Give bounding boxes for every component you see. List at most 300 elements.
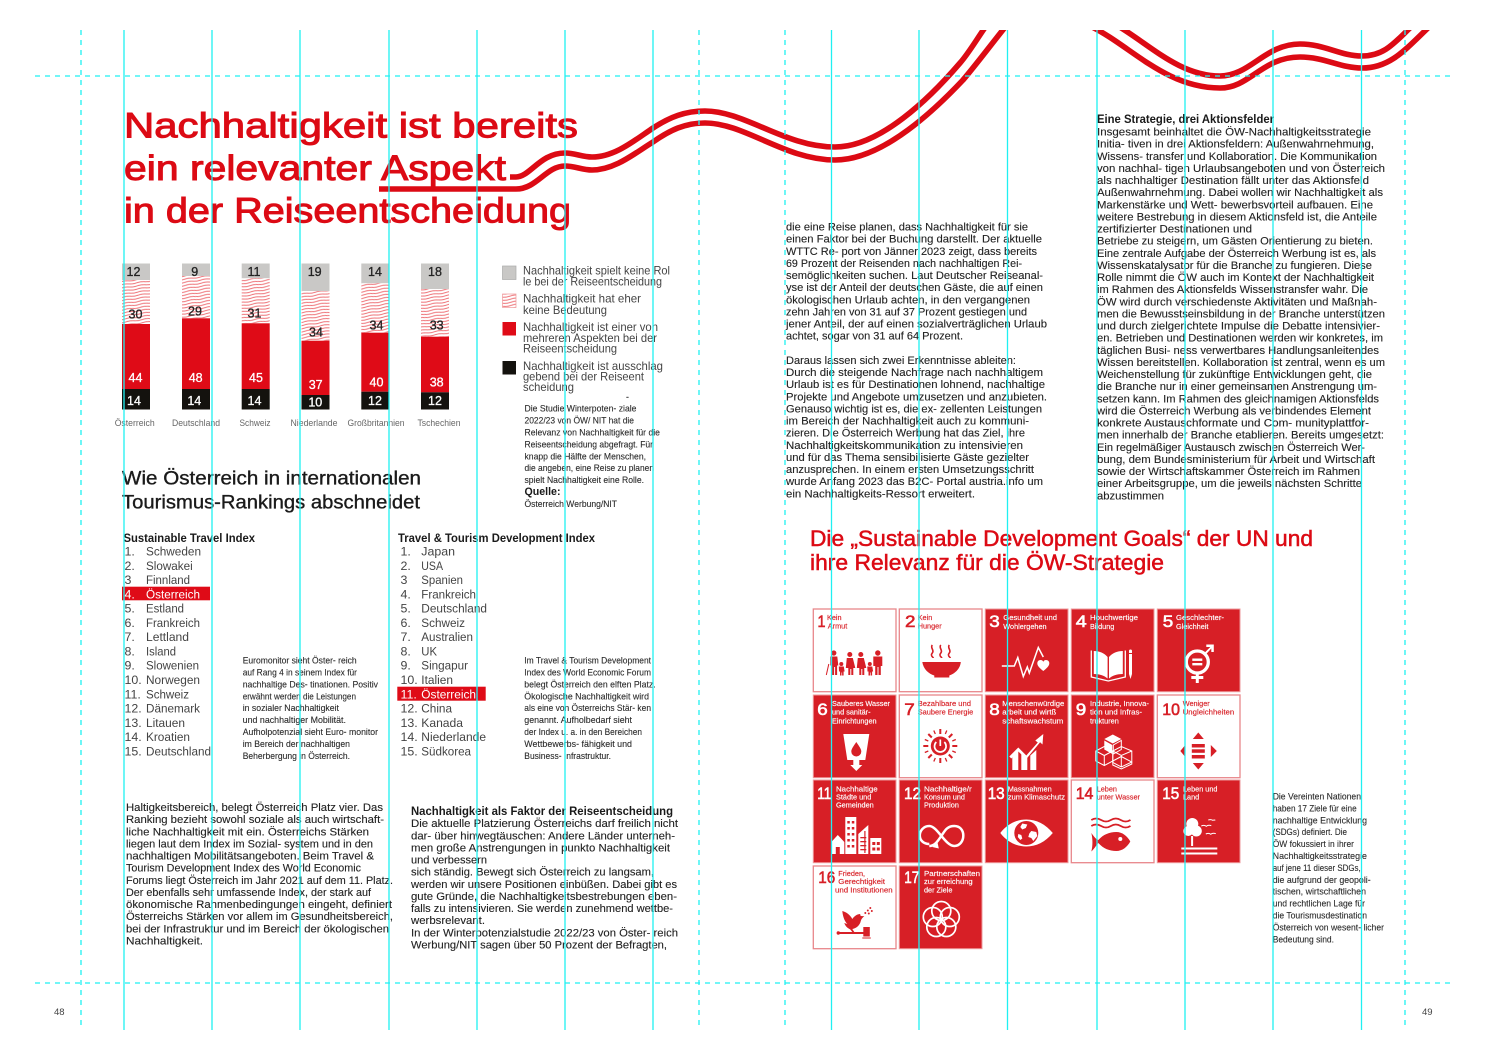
body text: rankings: Ranking bezieht sowohl soziale als auch wirtschaft- xyxy=(126,814,384,826)
body text: Eine Strategie, drei Aktionsfelder: Rolle nimmt die ÖW auch im Kontext der Nachhaltigkeit xyxy=(1097,272,1375,284)
bar: Schweiz xyxy=(240,264,271,428)
note: World Economic Forum: Business- Infrastruktur. xyxy=(524,751,611,761)
note: Vereinte Nationen: Die Vereinten Nationen xyxy=(1273,792,1361,802)
bar: Österreich: Österreich xyxy=(115,417,155,428)
SDG tile 13: zum Klimaschutz xyxy=(1008,792,1065,802)
list: Travel & Tourism Development Index: Schweiz xyxy=(421,616,465,630)
bar: Großbritannien: 34 xyxy=(370,318,383,332)
list: Sustainable Travel Index: 2. xyxy=(124,559,135,573)
bar: Niederlande: 10 xyxy=(308,396,322,410)
body text: middle column: Genauso wichtig ist es, die ex- zellenten Leistungen xyxy=(786,404,1042,416)
SDG tile 5 xyxy=(1157,609,1240,692)
note: Vereinte Nationen: nachhaltige Entwicklung xyxy=(1273,815,1367,825)
body text: Faktor der Reiseentscheidung: Die aktuelle Platzierung Österreichs darf freilich nicht xyxy=(411,818,679,830)
note: Euromonitor: Aufholpotenzial sieht Euro- monitor xyxy=(243,727,378,737)
list: Travel & Tourism Development Index: Deutschland xyxy=(421,602,487,616)
bar: Großbritannien: 40 xyxy=(370,376,383,390)
SDG tile 17: zur erreichung xyxy=(924,877,973,886)
body text: Faktor der Reiseentscheidung: dar- über hinwegtäuschen: Andere Länder unterneh- xyxy=(411,830,675,842)
SDG tile 4: Bildung xyxy=(1090,622,1114,631)
bar: Tschechien: 38 xyxy=(430,376,444,390)
bar: Schweiz: 11 xyxy=(248,265,261,279)
SDG tile 7: Saubere Energie xyxy=(918,708,973,717)
list: Travel & Tourism Development Index: Travel & Tourism Development Index xyxy=(398,532,596,545)
body text: rankings: Österreichs Stärken vor allem im Gesundheitsbereich, xyxy=(126,911,393,923)
list: Sustainable Travel Index: 8. xyxy=(124,644,135,658)
SDG tile 11 xyxy=(813,780,896,863)
SDG tile 1: Kein xyxy=(827,613,842,622)
list: Travel & Tourism Development Index: 4. xyxy=(400,587,411,601)
list: Sustainable Travel Index: Island xyxy=(146,644,176,658)
body text: Eine Strategie, drei Aktionsfelder: setzen kann. Im Rahmen des gleichnamigen Aktionsfelds xyxy=(1097,393,1379,405)
body text: middle column: WTTC Re- port von Jänner 2023 zeigt, dass bereits xyxy=(786,246,1037,258)
list: Sustainable Travel Index: Sustainable Travel Index xyxy=(124,532,256,545)
SDG tile 9: tion und Infras- xyxy=(1090,708,1143,717)
body text: Eine Strategie, drei Aktionsfelder: Wissens- transfer und Kollaboration. Die Kommunikation xyxy=(1097,151,1377,163)
body text: rankings: Tourism Development Index des World Economic xyxy=(126,863,361,875)
SDG tile 6: und sanitär- xyxy=(832,708,871,717)
list: Travel & Tourism Development Index: USA xyxy=(421,559,444,573)
legend: Nachhaltigkeit ist einer von xyxy=(523,321,658,334)
note: Euromonitor xyxy=(243,656,379,761)
legend: scheidung xyxy=(523,381,574,394)
note: Euromonitor: und nachhaltiger Mobilität. xyxy=(243,715,346,725)
SDG tile 2: 2 xyxy=(905,612,915,631)
legend xyxy=(502,264,670,402)
body text: middle column: Nachhaltigkeitskommunikation zu intensivieren xyxy=(786,440,1023,452)
body text: middle column: zieren. Die Österreich Werbung hat das Ziel, ihre xyxy=(786,428,1025,440)
list: Sustainable Travel Index: 14. xyxy=(124,730,142,744)
body text: Eine Strategie, drei Aktionsfelder: Wissen bereitstellen. Kollaboration ist zentral, wenn es um xyxy=(1097,357,1385,369)
SDG tile 14: unter Wasser xyxy=(1097,792,1141,802)
note: Vereinte Nationen: auf jene 11 dieser SDGs, xyxy=(1273,863,1361,873)
body text: middle column: im Bereich der Nachhaltigkeit auch zu kommuni- xyxy=(786,416,1029,428)
body text: middle column: und für das Thema sensibilisierte Gäste gezielter xyxy=(786,452,1029,464)
note: Euromonitor: im Bereich der nachhaltigen xyxy=(243,739,350,749)
SDG tile 2 xyxy=(899,609,982,692)
list: Sustainable Travel Index: Schweiz xyxy=(146,687,189,701)
SDG tile 1: 1 xyxy=(817,612,825,631)
body text: Faktor der Reiseentscheidung: falls zu intensivieren. Sie werden zunehmend wettbe- xyxy=(411,903,673,915)
page number left: 48 xyxy=(54,1007,65,1018)
bar: Deutschland: 14 xyxy=(187,394,201,408)
body text: Eine Strategie, drei Aktionsfelder: wird die Österreich Werbung als verbindendes Element xyxy=(1096,406,1372,418)
SDG tile 16: Frieden, xyxy=(838,869,865,878)
bar: Niederlande: 34 xyxy=(309,326,323,340)
list: Sustainable Travel Index: 6. xyxy=(124,616,135,630)
list: Sustainable Travel Index: Schweden xyxy=(146,545,201,559)
SDG tile 3: Wohlergehen xyxy=(1003,622,1047,631)
heading: rankings xyxy=(122,468,421,514)
bar: Schweiz: Schweiz xyxy=(240,417,271,428)
bar: Niederlande: 37 xyxy=(309,378,323,392)
list: Sustainable Travel Index: Finnland xyxy=(146,573,190,587)
note: Vereinte Nationen: haben 17 Ziele für eine xyxy=(1273,803,1357,813)
note: Vereinte Nationen: die Tourismusdestination xyxy=(1273,910,1367,920)
SDG tile 9: Industrie, Innova- xyxy=(1090,699,1150,708)
list: Travel & Tourism Development Index: 9. xyxy=(400,659,411,673)
body text: rankings: Haltigkeitsbereich, belegt Österreich Platz vier. Das xyxy=(126,802,383,814)
SDG tile 13: 13 xyxy=(988,784,1005,803)
SDG tile 11: Städte und xyxy=(836,792,871,802)
list: Travel & Tourism Development Index: Niederlande xyxy=(421,730,486,744)
list: Travel & Tourism Development Index: Italien xyxy=(421,673,453,687)
list: Sustainable Travel Index: Estland xyxy=(146,602,184,616)
title: in der Reiseentscheidung xyxy=(124,192,571,230)
body text: rankings: liegen laut dem Index im Sozial- system und in den xyxy=(126,838,373,850)
note: Vereinte Nationen: tischen, wirtschaftlichen xyxy=(1273,887,1366,897)
body text: Faktor der Reiseentscheidung: Nachhaltigkeit als Faktor der Reiseentscheidung xyxy=(411,805,673,818)
SDG tile 9 xyxy=(1071,695,1154,778)
SDG tile 11: Nachhaltige xyxy=(836,784,878,794)
body text: Eine Strategie, drei Aktionsfelder: Eine zentrale Aufgabe der Österreich Werbung ist es, als xyxy=(1097,248,1376,260)
chart note and source: spielt Nachhaltigkeit eine Rolle. xyxy=(524,475,644,485)
body text: Eine Strategie, drei Aktionsfelder: ÖW wird durch verschiedenste Aktivitäten und Maßnah- xyxy=(1097,296,1377,308)
list: Travel & Tourism Development Index: 6. xyxy=(400,616,411,630)
list: Sustainable Travel Index: 13. xyxy=(124,716,142,730)
body text: Eine Strategie, drei Aktionsfelder: einer Arbeitsgruppe, um die jeweils nächsten Schritte xyxy=(1097,478,1362,490)
heading: Sustainable Development Goals xyxy=(810,526,1313,575)
list: Travel & Tourism Development Index: 7. xyxy=(400,630,411,644)
legend: Nachhaltigkeit hat eher xyxy=(523,292,641,306)
SDG tile 7: Bezahlbare und xyxy=(918,699,971,708)
note: World Economic Forum: genannt. Aufholbedarf sieht xyxy=(524,715,633,725)
body text: Eine Strategie, drei Aktionsfelder: Eine Strategie, drei Aktionsfelder xyxy=(1097,113,1274,126)
SDG tile 15: Land xyxy=(1183,792,1199,802)
bar: Tschechien xyxy=(418,264,460,428)
note: Vereinte Nationen: und rechtlichen Lage für xyxy=(1273,899,1365,909)
body text: Eine Strategie, drei Aktionsfelder: abzustimmen xyxy=(1097,490,1164,502)
SDG tile 12: Produktion xyxy=(924,800,959,810)
SDG tile 8: arbeit und wirtß xyxy=(1002,708,1057,717)
SDG tile 3: Gesundheit und xyxy=(1003,613,1057,622)
list: Sustainable Travel Index xyxy=(122,532,256,758)
body text: Eine Strategie, drei Aktionsfelder: konkrete Austauschformate und Com- munityplattfor- xyxy=(1097,418,1369,430)
body text: middle column: wurde Anfang 2023 das B2C- Portal austria.info um xyxy=(785,476,1043,488)
body text: middle column: 69 Prozent der Reisenden nach nachhaltigen Rei- xyxy=(786,258,1022,270)
list: Travel & Tourism Development Index: 1. xyxy=(400,545,411,559)
body text: Faktor der Reiseentscheidung: In der Winterpotenzialstudie 2022/23 von Öster- reich xyxy=(411,927,678,939)
list: Sustainable Travel Index: 10. xyxy=(124,673,142,687)
list: Sustainable Travel Index: Deutschland xyxy=(146,744,211,758)
list: Sustainable Travel Index: Slowakei xyxy=(146,559,193,573)
list: Travel & Tourism Development Index: Spanien xyxy=(421,573,463,587)
body text: rankings: bei der Infrastruktur und im Bereich der ökologischen xyxy=(126,923,389,935)
page number right: 49 xyxy=(1422,1007,1433,1018)
bar: Niederlande: 19 xyxy=(308,265,322,279)
note: Euromonitor: auf Rang 4 in seinem Index für xyxy=(243,667,357,677)
list: Travel & Tourism Development Index: Österreich xyxy=(421,687,476,701)
SDG tile 15 xyxy=(1157,780,1240,863)
note: Vereinte Nationen: Nachhaltigkeitsstrategie xyxy=(1273,851,1367,861)
SDG tile 5: 5 xyxy=(1163,612,1173,631)
list: Travel & Tourism Development Index: 2. xyxy=(400,559,411,573)
list: Sustainable Travel Index: 5. xyxy=(124,602,135,616)
body text: Eine Strategie, drei Aktionsfelder: Initia- tiven in drei Aktionsfeldern: Außenwahrnehmung, xyxy=(1097,139,1374,151)
SDG tile 10: Weniger xyxy=(1183,699,1210,708)
body text: Eine Strategie, drei Aktionsfelder: täglichen Busi- ness verwertbares Handlungsanleitendes xyxy=(1097,345,1379,357)
bar: Niederlande: Niederlande xyxy=(290,417,338,428)
body text: middle column: anzusprechen. In einem ersten Umsetzungsschritt xyxy=(786,464,1035,476)
legend: keine Bedeutung xyxy=(523,304,607,317)
body text: middle column: Urlaub ist es für Destinationen lohnend, nachhaltige xyxy=(786,379,1045,391)
SDG tile 15: Leben und xyxy=(1183,784,1218,794)
chart note and source: Reiseentscheidung abgefragt. Für xyxy=(524,440,653,450)
body text: Eine Strategie, drei Aktionsfelder: Betriebe zu steigern, um Gästen Orientierung zu bieten. xyxy=(1097,236,1373,248)
SDG tile 14 xyxy=(1071,780,1154,863)
SDG tile 1: Armut xyxy=(828,622,847,630)
list: Travel & Tourism Development Index: 11. xyxy=(400,687,417,701)
title xyxy=(124,106,578,230)
chart note and source: Die Studie Winterpoten- ziale xyxy=(524,404,637,414)
bar: Niederlande xyxy=(290,264,338,428)
SDG tile 10: 10 xyxy=(1162,700,1180,719)
bar: Österreich: 30 xyxy=(129,308,142,322)
SDG tile 10: Ungleichheiten xyxy=(1183,708,1234,717)
list: Travel & Tourism Development Index: China xyxy=(421,702,452,716)
SDG tile 16: und Institutionen xyxy=(835,886,893,894)
list: Travel & Tourism Development Index: Frankreich xyxy=(421,587,476,601)
note: World Economic Forum: Im Travel & Tourism Development xyxy=(524,656,652,666)
list: Travel & Tourism Development Index: Japan xyxy=(421,545,455,559)
SDG tile grid xyxy=(813,609,1240,949)
SDG tile 9: trukturen xyxy=(1090,716,1119,725)
SDG tile 6: Einrichtungen xyxy=(832,716,877,725)
bar: Schweiz: 45 xyxy=(249,371,263,385)
body text: Faktor der Reiseentscheidung: sich ständig. Bewegt sich Österreich zu langsam, xyxy=(411,867,654,879)
body text: Faktor der Reiseentscheidung: werden wir unsere Positionen einbüßen. Dabei gibt es xyxy=(410,879,677,891)
body text: Eine Strategie, drei Aktionsfelder: im Rahmen des Aktionsfelds Wissenstransfer wahr. Die xyxy=(1097,284,1368,296)
SDG tile 16 xyxy=(813,866,896,949)
bar: Österreich: 44 xyxy=(129,371,142,385)
SDG tile 2: Kein xyxy=(918,613,932,622)
body text: Eine Strategie, drei Aktionsfelder: die Branche nur in einer gemeinsamen Anstrengung um- xyxy=(1097,381,1377,393)
note: World Economic Forum: belegt Österreich den elften Platz. xyxy=(524,679,656,689)
note: Euromonitor: nachhaltige Des- tinationen. Positiv xyxy=(243,679,379,689)
SDG tile 15: 15 xyxy=(1162,784,1179,803)
body text: Eine Strategie, drei Aktionsfelder: Weichenstellung für zukünftige Entwicklungen geht, die xyxy=(1097,369,1372,381)
bar: Deutschland: Deutschland xyxy=(172,417,220,428)
body text: middle column: yse ist der Anteil der deutschen Gäste, die auf einen xyxy=(786,282,1043,294)
heading: Sustainable Development Goals: ihre Relevanz für die ÖW-Strategie xyxy=(810,550,1164,575)
SDG tile 17: der Ziele xyxy=(924,886,952,894)
list: Sustainable Travel Index: 3 xyxy=(124,573,132,587)
list: Sustainable Travel Index: 4. xyxy=(124,587,135,601)
list: Sustainable Travel Index: 1. xyxy=(124,545,135,559)
SDG tile 4: 4 xyxy=(1076,612,1087,631)
note: World Economic Forum: als eine von Österreichs Stär- ken xyxy=(524,703,651,713)
list: Travel & Tourism Development Index: 15. xyxy=(400,744,418,758)
bar: Deutschland: 29 xyxy=(188,304,202,318)
SDG tile 13 xyxy=(985,780,1068,863)
body text: Eine Strategie, drei Aktionsfelder: men die Bewusstseinsbildung in der Branche unterstützen xyxy=(1097,308,1385,320)
note: World Economic Forum: Wettbewerbs- fähigkeit und xyxy=(524,739,632,749)
body text: rankings xyxy=(126,802,393,947)
bar: Großbritannien xyxy=(348,264,404,428)
SDG tile 12 xyxy=(899,780,982,863)
bar: Großbritannien: 12 xyxy=(368,394,382,408)
list: Travel & Tourism Development Index: 8. xyxy=(400,644,411,658)
legend: Nachhaltigkeit ist ausschlag xyxy=(523,360,663,373)
body text: Faktor der Reiseentscheidung: werbsrelevant. xyxy=(410,915,485,927)
list: Sustainable Travel Index: 11. xyxy=(124,687,141,701)
chart note and source: Relevanz von Nachhaltigkeit für die xyxy=(524,428,660,438)
wave ribbon right page xyxy=(1090,26,1430,88)
note: Euromonitor: erwähnt werden die Leistungen xyxy=(243,691,356,701)
body text: Eine Strategie, drei Aktionsfelder: und durch zielgerichtete Impulse die Debatte intensivier- xyxy=(1097,321,1380,333)
list: Sustainable Travel Index: Dänemark xyxy=(146,702,201,716)
SDG tile 12: Konsum und xyxy=(924,792,965,802)
SDG tile 8 xyxy=(985,695,1068,778)
heading: Sustainable Development Goals: Die „Sustainable Development Goals“ der UN und xyxy=(810,526,1313,551)
SDG tile 16: 16 xyxy=(818,868,835,887)
SDG tile 7: 7 xyxy=(904,700,915,719)
title: ein relevanter Aspekt xyxy=(124,149,506,188)
list: Sustainable Travel Index: Litauen xyxy=(146,716,185,730)
legend: Reiseentscheidung xyxy=(523,342,617,356)
body text: Eine Strategie, drei Aktionsfelder: Markenstärke und Wett- bewerbsvorteil aufbauen. Eine xyxy=(1097,199,1373,211)
SDG tile 14: 14 xyxy=(1076,784,1093,803)
body text: middle column: Durch die steigende Nachfrage nach nachhaltigem xyxy=(786,367,1043,379)
bar: Tschechien: Tschechien xyxy=(418,417,460,428)
list: Sustainable Travel Index: 15. xyxy=(124,744,142,758)
body text: Eine Strategie, drei Aktionsfelder: Wissenskatalysator für die Branche zu fungieren. Diese xyxy=(1097,260,1372,272)
SDG tile 4: Houchwertige xyxy=(1090,613,1138,622)
body text: middle column: ein Nachhaltigkeits-Ressort erweitert. xyxy=(786,488,975,500)
bar: Österreich xyxy=(115,264,155,428)
body text: rankings: Forums liegt Österreich im Jahr 2021 auf dem 11. Platz. xyxy=(126,875,393,887)
SDG tile 6: Sauberes Wasser xyxy=(832,699,891,708)
body text: rankings: nachhaltigen Mobilitätsangeboten. Beim Travel & xyxy=(126,850,374,862)
note: Euromonitor: Euromonitor sieht Öster- reich xyxy=(243,656,357,666)
bar: Österreich: 12 xyxy=(127,265,140,279)
note: World Economic Forum xyxy=(524,656,656,761)
body text: rankings: Der ebenfalls sehr umfassende Index, der stark auf xyxy=(126,887,372,899)
body text: Eine Strategie, drei Aktionsfelder: weitere Bestrebung in diesem Aktionsfeld ist, die Anteile xyxy=(1096,211,1377,223)
body text: middle column: ökologischen Urlaub achten, in den vergangenen xyxy=(786,294,1030,306)
SDG tile 4 xyxy=(1071,609,1154,692)
body text: middle column xyxy=(785,222,1047,500)
body text: Eine Strategie, drei Aktionsfelder: men innerhalb der Branche etablieren. Bereits umgesetzt: xyxy=(1097,430,1384,442)
bar: Österreich: 14 xyxy=(127,394,141,408)
body text: middle column: die eine Reise planen, dass Nachhaltigkeit für sie xyxy=(786,222,1028,234)
body text: Faktor der Reiseentscheidung: gute Gründe, die Nachhaltigkeitsbestrebungen eben- xyxy=(411,891,677,903)
legend: gebend bei der Reiseent xyxy=(523,370,645,384)
title: Nachhaltigkeit ist bereits xyxy=(124,106,578,146)
list: Sustainable Travel Index: 9. xyxy=(124,659,135,673)
SDG tile 1 xyxy=(813,609,896,692)
body text: Faktor der Reiseentscheidung: Werbung/NIT sagen über 50 Prozent der Befragten, xyxy=(411,939,667,951)
body text: rankings: Nachhaltigkeit. xyxy=(126,935,203,947)
SDG tile 7 xyxy=(899,695,982,778)
SDG tile 17: Partnerschaften xyxy=(924,869,980,878)
chart note and source xyxy=(524,404,660,509)
bar: Großbritannien: Großbritannien xyxy=(348,417,404,428)
note: World Economic Forum: der Index u. a. in den Bereichen xyxy=(524,727,642,737)
SDG tile 12: Nachhaltige/r xyxy=(924,784,972,794)
SDG tile 3: 3 xyxy=(989,612,1000,631)
list: Travel & Tourism Development Index: UK xyxy=(421,644,438,658)
bar: Schweiz: 14 xyxy=(248,394,261,408)
SDG tile 17 xyxy=(899,866,982,949)
bar: Schweiz: 31 xyxy=(248,306,261,320)
SDG tile 5: Gleichheit xyxy=(1176,622,1208,631)
bar: Tschechien: 33 xyxy=(430,318,444,332)
SDG tile 5: Geschlechter- xyxy=(1176,613,1225,622)
SDG tile 16: Gerechtigkeit xyxy=(838,877,885,886)
bar: Tschechien: 18 xyxy=(428,265,442,279)
heading: rankings: Tourismus-Rankings abschneidet xyxy=(122,492,421,514)
list: Sustainable Travel Index: Slowenien xyxy=(146,659,199,673)
body text: middle column: Projekte und Angebote umzusetzen und anzubieten. xyxy=(786,391,1047,403)
list: Sustainable Travel Index: Lettland xyxy=(146,630,189,644)
SDG tile 12: 12 xyxy=(904,784,921,803)
SDG tile 10 xyxy=(1157,695,1240,778)
bar: Deutschland: 9 xyxy=(191,265,198,279)
body text: middle column: achtet, sogar von 31 auf 64 Prozent. xyxy=(786,331,963,343)
body text: rankings: liche Nachhaltigkeit mit ein. Österreichs Stärken xyxy=(126,826,369,838)
body text: Eine Strategie, drei Aktionsfelder: als nachhaltiger Destination fällt unter das Aktionsfeld xyxy=(1097,175,1369,187)
list: Travel & Tourism Development Index: Singapur xyxy=(421,659,468,673)
body text: Eine Strategie, drei Aktionsfelder: Ein regelmäßiger Austausch zwischen Österreich Wer- xyxy=(1097,442,1365,454)
SDG tile 8: schaftswachstum xyxy=(1002,716,1063,725)
note: Vereinte Nationen: die aufgrund der geopoli- xyxy=(1273,875,1371,885)
list: Travel & Tourism Development Index: Australien xyxy=(421,630,473,644)
list: Travel & Tourism Development Index: 12. xyxy=(400,702,418,716)
note: Vereinte Nationen xyxy=(1273,792,1384,944)
body text: Eine Strategie, drei Aktionsfelder: en. Betrieben und Destinationen werden wir konkretes, im xyxy=(1097,333,1383,345)
list: Travel & Tourism Development Index xyxy=(397,532,596,758)
body text: Eine Strategie, drei Aktionsfelder: Außenwahrnehmung. Dabei wollen wir Nachhaltigkeit als xyxy=(1097,187,1383,199)
list: Travel & Tourism Development Index: Südkorea xyxy=(421,744,471,758)
body text: Eine Strategie, drei Aktionsfelder: von nachhal- tigen Urlaubsangeboten und von Österreich xyxy=(1097,163,1385,175)
body text: Eine Strategie, drei Aktionsfelder: sowie der Wirtschaftskammer Österreich im Rahmen xyxy=(1097,466,1360,478)
SDG tile 11: Gemeinden xyxy=(836,800,874,810)
list: Travel & Tourism Development Index: 3 xyxy=(400,573,408,587)
chart note and source: 2022/23 von ÖW/ NIT hat die xyxy=(524,416,634,426)
SDG tile 13: Massnahmen xyxy=(1008,784,1052,794)
SDG tile 6 xyxy=(813,695,896,778)
SDG tile 9: 9 xyxy=(1076,700,1086,719)
list: Travel & Tourism Development Index: 14. xyxy=(400,730,418,744)
note: Euromonitor: in sozialer Nachhaltigkeit xyxy=(243,703,340,713)
body text: middle column: einen Faktor bei der Buchung darstellt. Der aktuelle xyxy=(786,234,1042,246)
bar: Deutschland xyxy=(172,264,220,428)
note: Vereinte Nationen: Bedeutung sind. xyxy=(1273,934,1334,944)
SDG tile 11: 11 xyxy=(817,784,831,803)
body text: Faktor der Reiseentscheidung: men große Anstrengungen in punkto Nachhaltigkeit xyxy=(411,842,671,854)
SDG tile 3 xyxy=(985,609,1068,692)
SDG tile 14: Leben xyxy=(1097,784,1117,794)
body text: Faktor der Reiseentscheidung: und verbessern xyxy=(411,854,487,866)
note: World Economic Forum: Index des World Economic Forum xyxy=(524,667,651,677)
body text: middle column: jener Anteil, der auf einen sozialverträglichen Urlaub xyxy=(785,318,1047,330)
list: Travel & Tourism Development Index: 13. xyxy=(400,716,418,730)
bar: Tschechien: 12 xyxy=(428,394,442,408)
bar: Deutschland: 48 xyxy=(189,371,203,385)
chart note and source: die angeben, eine Reise zu planen xyxy=(524,463,654,473)
list: Sustainable Travel Index: 7. xyxy=(124,630,135,644)
chart note and source: Österreich Werbung/NIT xyxy=(524,499,618,509)
legend: mehreren Aspekten bei der xyxy=(523,332,657,345)
heading: rankings: Wie Österreich in internationalen xyxy=(122,468,421,490)
wave ribbon left page xyxy=(379,26,1006,189)
SDG tile 17: 17 xyxy=(904,868,919,887)
bar: Großbritannien: 14 xyxy=(368,265,382,279)
list: Travel & Tourism Development Index: Kanada xyxy=(421,716,463,730)
body text: Faktor der Reiseentscheidung xyxy=(410,805,679,951)
body text: middle column: semöglichkeiten suchen. Laut Deutscher Reiseanal- xyxy=(786,270,1043,282)
